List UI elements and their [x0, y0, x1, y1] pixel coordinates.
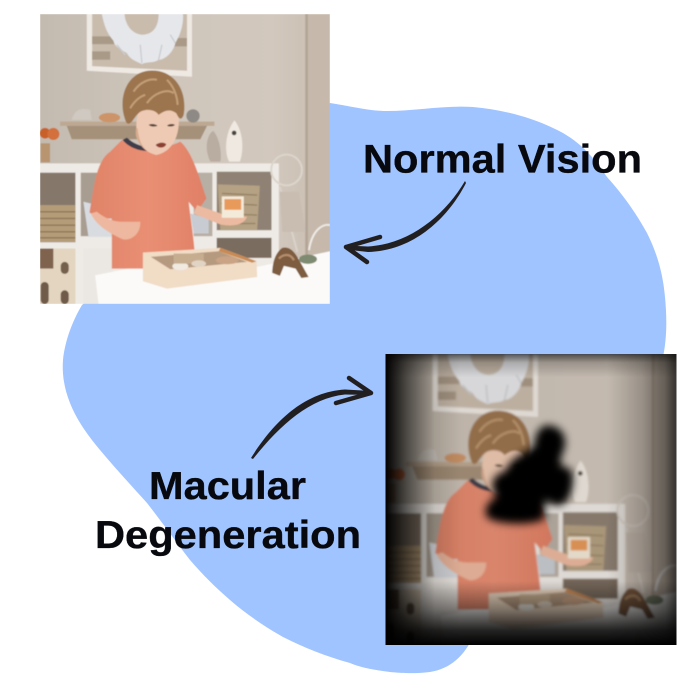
heading: Macular Degeneration	[95, 465, 361, 557]
photo: macular degeneration simulation	[385, 354, 676, 645]
heading: Normal Vision: Normal Vision	[363, 138, 642, 182]
dark central blind spot	[486, 425, 573, 524]
heading: Macular Degeneration: Degeneration	[95, 514, 361, 557]
arrow: to normal vision photo	[346, 181, 466, 262]
background blob	[63, 103, 666, 673]
arrow: to macular degeneration photo	[251, 378, 371, 459]
photo: normal vision	[40, 14, 330, 304]
heading: Macular Degeneration: Macular	[149, 465, 306, 508]
